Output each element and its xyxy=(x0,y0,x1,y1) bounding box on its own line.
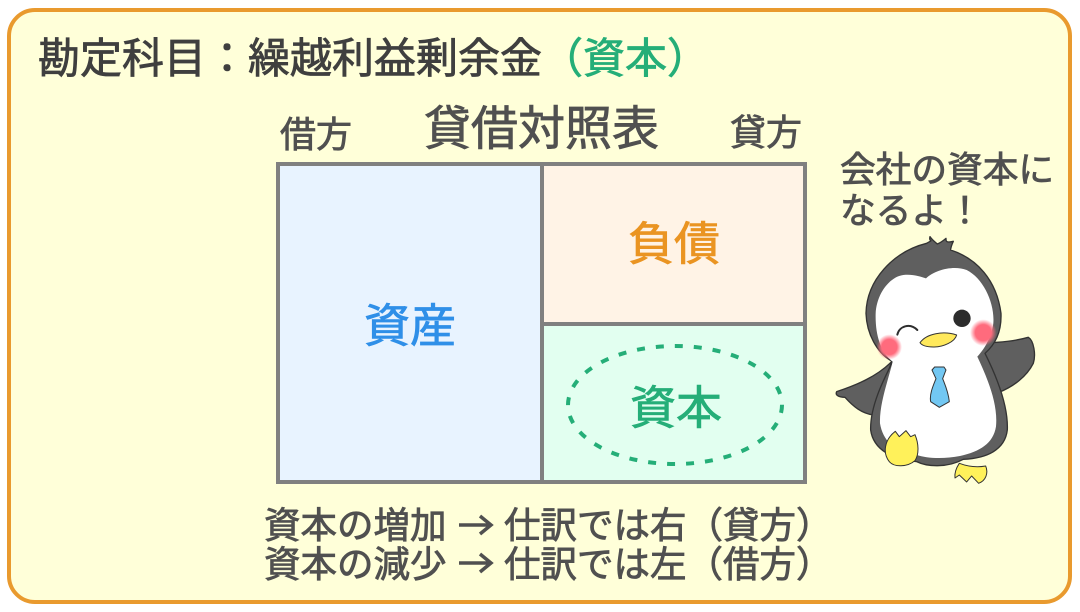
necktie xyxy=(930,367,949,407)
panel: assets xyxy=(278,164,542,482)
icon: penguin mascot xyxy=(836,237,1034,483)
open eye xyxy=(953,310,971,327)
penguin belly xyxy=(876,268,996,458)
left foot xyxy=(885,431,918,466)
note: increase in capital: 資本の増加 xyxy=(264,505,446,546)
penguin right wing xyxy=(977,337,1034,393)
penguin body xyxy=(866,237,1007,466)
label: debit side: 借方 xyxy=(280,114,352,155)
note: decrease in capital: 資本の減少 xyxy=(264,544,446,585)
arrow: decrease xyxy=(459,554,491,572)
speech text xyxy=(840,150,1054,231)
penguin cheeks xyxy=(877,334,902,360)
panel: capital xyxy=(542,324,805,482)
penguin left wing xyxy=(836,362,892,415)
panel: capital: 資本 xyxy=(630,382,722,434)
speech text: 会社の資本に xyxy=(840,150,1054,190)
speech text: なるよ！ xyxy=(840,191,983,231)
winking eye xyxy=(897,326,917,335)
table frame xyxy=(278,164,805,482)
beak xyxy=(920,333,957,347)
title accent: capital: （資本） xyxy=(541,35,709,82)
dashed ellipse highlight xyxy=(568,346,782,464)
panel: liabilities: 負債 xyxy=(628,218,720,270)
label: credit side: 貸方 xyxy=(730,112,802,153)
note: increase in capital xyxy=(264,505,832,546)
note: decrease in capital: 仕訳では左（借方） xyxy=(504,544,832,585)
note: decrease in capital xyxy=(264,544,832,585)
panel: assets: 資産 xyxy=(364,300,456,352)
note: increase in capital: 仕訳では右（貸方） xyxy=(504,505,832,546)
heading: balance sheet: 貸借対照表 xyxy=(424,102,659,155)
title: 勘定科目：繰越利益剰余金 xyxy=(38,35,542,82)
panel: liabilities xyxy=(542,164,805,324)
right foot xyxy=(955,463,987,483)
balance sheet table xyxy=(278,164,805,482)
arrow: increase xyxy=(459,516,491,534)
